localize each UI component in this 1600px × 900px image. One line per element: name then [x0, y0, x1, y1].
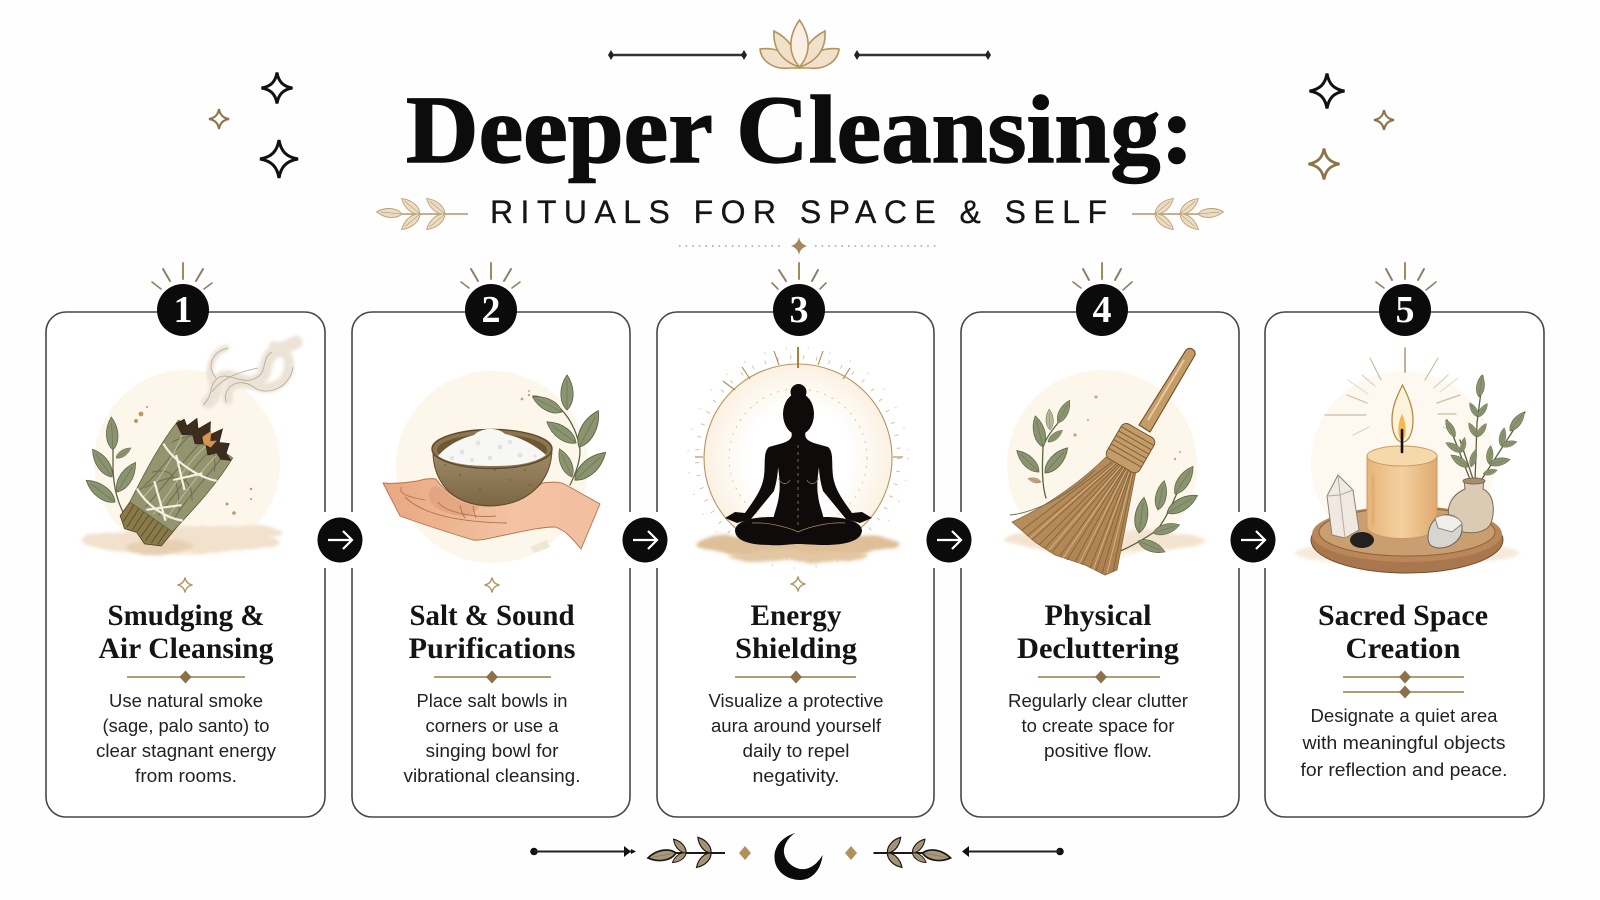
illustration: salt bowl on hand	[383, 371, 610, 563]
heading 1	[98, 599, 274, 665]
text block 4: positive flow.	[1044, 741, 1152, 761]
heading 2: Salt & Sound	[410, 599, 575, 632]
divider 4	[1038, 670, 1160, 684]
subtitle: RITUALS FOR SPACE & SELF	[490, 194, 1107, 230]
rays above badge 4	[1073, 263, 1132, 290]
number badge 3	[773, 284, 825, 336]
text block 4: Regularly clear clutter	[1008, 691, 1188, 711]
text block 2	[404, 691, 580, 786]
heading 5: Sacred Space	[1318, 599, 1488, 632]
text block 3	[708, 691, 884, 786]
small sparkle	[790, 576, 806, 592]
number badge 3: 3	[790, 289, 808, 331]
divider 1	[127, 670, 245, 684]
text block 1: from rooms.	[135, 766, 237, 786]
sparkles left	[209, 72, 298, 178]
illustration: broom	[1005, 348, 1205, 575]
footer left arrow	[530, 846, 636, 857]
heading 3: Energy	[750, 599, 842, 632]
text block 3: daily to repel	[742, 741, 850, 761]
number badge 4: 4	[1092, 289, 1112, 331]
footer left leaves	[647, 835, 725, 870]
text block 2: vibrational cleansing.	[404, 766, 580, 786]
heading 4	[1017, 599, 1179, 665]
text block 2: singing bowl for	[426, 741, 558, 761]
heading 2: Purifications	[408, 632, 576, 665]
text block 2: corners or use a	[426, 716, 560, 736]
illustration: meditating figure with aura	[688, 347, 908, 568]
panel: card 1 smudging	[46, 263, 325, 817]
double divider 5	[1343, 670, 1464, 698]
rays above badge 5	[1376, 263, 1436, 290]
footer right leaves	[874, 835, 951, 870]
panel: card 4 physical decluttering	[961, 263, 1239, 817]
rays above badge 2	[461, 263, 520, 288]
number badge 2	[465, 284, 517, 336]
sparkles right	[1308, 74, 1394, 180]
heading 5	[1318, 599, 1488, 665]
text block 3: Visualize a protective	[708, 691, 884, 711]
laurel left	[376, 195, 468, 233]
small sparkle	[178, 578, 192, 592]
number badge 5	[1379, 284, 1431, 336]
title: Deeper Cleansing:	[406, 76, 1194, 183]
heading 3: Shielding	[735, 632, 857, 665]
footer diamonds	[739, 846, 857, 860]
arrow 4 to 5	[1230, 512, 1276, 568]
text block 2: Place salt bowls in	[416, 691, 568, 711]
heading 4: Decluttering	[1017, 632, 1179, 665]
number badge 1	[157, 284, 209, 336]
panel: card 5 sacred space	[1265, 263, 1544, 817]
heading 1: Smudging &	[108, 599, 264, 632]
number badge 5: 5	[1396, 289, 1414, 331]
heading 2	[408, 599, 576, 665]
text block 3: negativity.	[752, 766, 840, 786]
heading 1: Air Cleansing	[98, 632, 274, 665]
number badge 1: 1	[174, 289, 192, 331]
text block 5: with meaningful objects	[1301, 733, 1506, 753]
text block 4: to create space for	[1022, 716, 1174, 736]
heading 4: Physical	[1044, 599, 1152, 632]
laurel right	[1132, 195, 1224, 233]
text block 5: Designate a quiet area	[1310, 706, 1499, 726]
arrow 1 to 2	[318, 512, 362, 568]
heading 3	[735, 599, 857, 665]
text block 1: Use natural smoke	[109, 691, 263, 711]
rays above badge 1	[152, 263, 212, 289]
heading 5: Creation	[1346, 632, 1461, 665]
small sparkle	[484, 578, 500, 592]
crescent moon	[774, 833, 823, 880]
text block 1: (sage, palo santo) to	[102, 716, 270, 736]
text block 4	[1008, 691, 1188, 761]
arrow 3 to 4	[926, 512, 972, 568]
footer ornament: moon with leaves and arrows	[530, 833, 1064, 880]
number badge 4	[1076, 284, 1128, 336]
illustration: candle tray	[1295, 348, 1528, 573]
panel: card 3 energy shielding	[657, 263, 934, 817]
text block 1: clear stagnant energy	[96, 741, 276, 761]
arrow 2 to 3	[622, 512, 668, 568]
divider 2	[434, 670, 551, 684]
number badge 2: 2	[482, 289, 500, 331]
text block 3: aura around yourself	[711, 716, 882, 736]
rays above badge 3	[772, 263, 826, 289]
illustration: sage bundle	[82, 342, 296, 557]
header ornament: lotus with lines	[608, 20, 991, 68]
text block 1	[96, 691, 276, 786]
text block 5	[1300, 706, 1508, 780]
footer right arrow	[962, 846, 1064, 857]
panel: card 2 salt and sound	[352, 263, 630, 817]
text block 5: for reflection and peace.	[1300, 760, 1508, 780]
divider 3	[735, 670, 856, 684]
dotted divider with diamond	[679, 237, 936, 255]
